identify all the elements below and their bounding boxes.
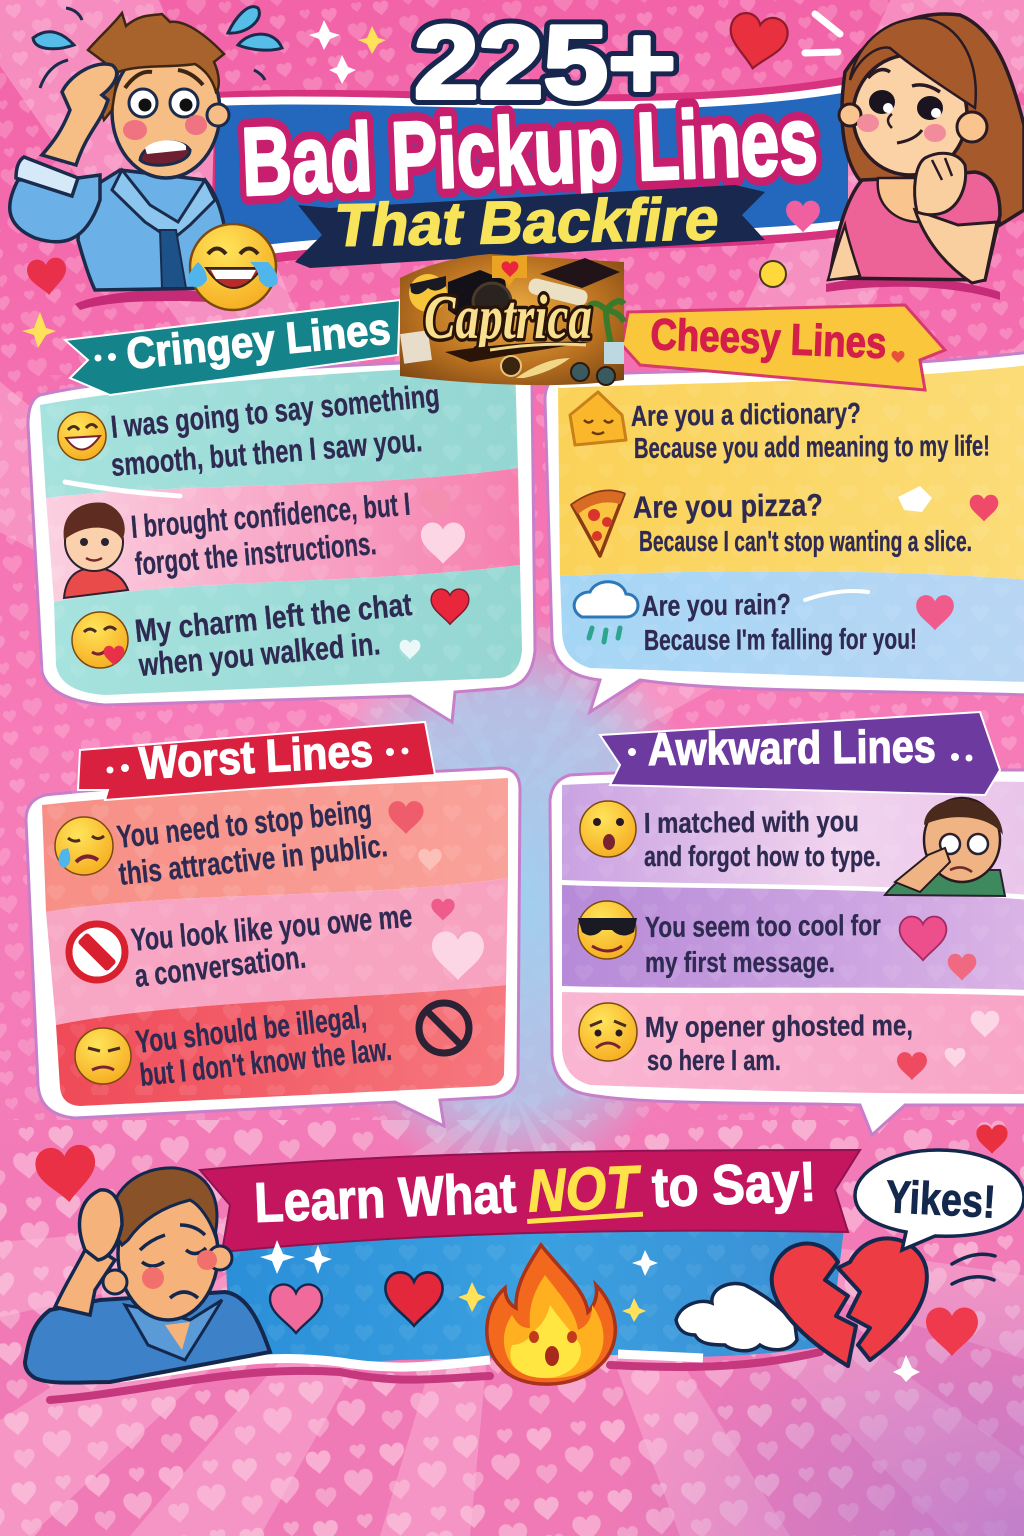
- row bands: [40, 362, 522, 695]
- panel: worst lines: [26, 722, 520, 1126]
- title: 225+: 225+: [414, 5, 676, 121]
- callout: Yikes speech bubble: [855, 1150, 1024, 1250]
- line 3: My charm left the chat: [133, 586, 414, 649]
- footer banner: Learn What NOT to Say: NOT: [527, 1153, 643, 1224]
- line 1: I was going to say something: [109, 377, 441, 445]
- line 2 with sunglasses emoji: [578, 901, 976, 980]
- footer banner: Learn What NOT to Say: [200, 1146, 860, 1252]
- title banner: Bad Pickup Lines: Bad Pickup Lines: [240, 87, 819, 216]
- line 3 with sad emoji: so here I am.: [647, 1045, 781, 1077]
- line 2 with no-entry icon: a conversation.: [133, 938, 308, 994]
- line 2 with sunglasses emoji: my first message.: [645, 947, 835, 979]
- line 2 with sunglasses emoji: You seem too cool for: [645, 910, 881, 944]
- heading ribbon: Awkward Lines: [648, 720, 936, 775]
- row bands: [560, 780, 1024, 1094]
- icon: broken heart with wings: [676, 1238, 995, 1366]
- row bands: [556, 365, 1024, 682]
- line 1 with sleepy emoji: [570, 392, 990, 465]
- heading ribbon: Worst Lines: [138, 724, 374, 789]
- heading ribbon: Cringey Lines: [124, 304, 393, 379]
- heading ribbon: [600, 712, 1000, 795]
- character: sad man bottom left: [25, 1168, 270, 1383]
- icon: flame with face: [487, 1245, 615, 1384]
- heading ribbon: [622, 305, 945, 390]
- footer: blue area with wavy white edge: [50, 1220, 845, 1400]
- speech bubble body: [26, 768, 520, 1126]
- speech bubble body: [28, 358, 535, 722]
- line 1: [55, 792, 442, 892]
- emoji: crying laughing: [188, 224, 278, 310]
- line 1: smooth, but then I saw you.: [110, 422, 424, 483]
- line 2 with no-entry icon: You look like you owe me: [129, 898, 414, 958]
- subtitle banner: That Backfire: That Backfire: [330, 185, 725, 259]
- logo: Captrica badge: Captrica: [424, 284, 592, 352]
- line 3: [72, 586, 469, 683]
- line 2 with cartoon man: I brought confidence, but I: [130, 486, 412, 545]
- heading ribbon: Cheesy Lines: [650, 310, 887, 368]
- line 2 with cartoon man: [64, 486, 465, 598]
- heading ribbon: [65, 300, 400, 395]
- panel: cringey lines: [28, 300, 535, 722]
- line 1 with sleepy emoji: Are you a dictionary?: [631, 398, 861, 433]
- line 1 with glasses man: and forgot how to type.: [644, 841, 881, 873]
- panel: cheesy lines: [545, 305, 1024, 712]
- row bands: [42, 778, 508, 1106]
- line 2 with pizza: Are you pizza?: [633, 487, 823, 525]
- line 2 with cartoon man: forgot the instructions.: [133, 525, 378, 582]
- line 3: when you walked in.: [137, 625, 382, 683]
- title: 225+: 225+: [414, 5, 676, 121]
- line 3 with no sign: but I don't know the law.: [138, 1031, 393, 1093]
- line 3 with no sign: [75, 998, 469, 1093]
- line 1 with glasses man: I matched with you: [644, 806, 859, 840]
- footer banner: Learn What NOT to Say: Learn What: [253, 1161, 517, 1234]
- title banner: Bad Pickup Lines: [240, 87, 819, 216]
- line 1: this attractive in public.: [117, 827, 389, 892]
- footer hearts and sparkles: [34, 1125, 1008, 1382]
- line 1: You need to stop being: [115, 792, 373, 855]
- line 3 with sad emoji: My opener ghosted me,: [645, 1010, 913, 1044]
- header banner: blue ribbon behind title: [75, 76, 1000, 310]
- line 1: [58, 377, 441, 483]
- line 2 with pizza: [572, 486, 998, 558]
- character: skeptical woman top right: [805, 14, 1024, 283]
- character: stressed man top left: [10, 7, 282, 290]
- line 3 with rain cloud: [574, 582, 954, 657]
- footer banner: Learn What NOT to Say: to Say!: [651, 1149, 817, 1219]
- decorative hearts and sparkles in header: [22, 11, 820, 348]
- callout: Yikes speech bubble: Yikes!: [884, 1170, 997, 1228]
- line 1 with glasses man: [580, 798, 1005, 896]
- logo: Captrica badge: [400, 254, 624, 385]
- line 2 with no-entry icon: [69, 898, 484, 994]
- heading ribbon: [78, 722, 435, 800]
- line 3 with no sign: You should be illegal,: [134, 998, 368, 1060]
- speech bubble body: [545, 352, 1024, 712]
- line 3 with rain cloud: Are you rain?: [642, 589, 791, 623]
- line 3 with sad emoji: [579, 1003, 999, 1080]
- title banner: Bad Pickup Lines: Bad Pickup Lines: [240, 87, 819, 216]
- panel: awkward lines: [550, 712, 1024, 1135]
- line 3 with rain cloud: Because I'm falling for you!: [644, 624, 917, 657]
- speech bubble body: [550, 770, 1024, 1135]
